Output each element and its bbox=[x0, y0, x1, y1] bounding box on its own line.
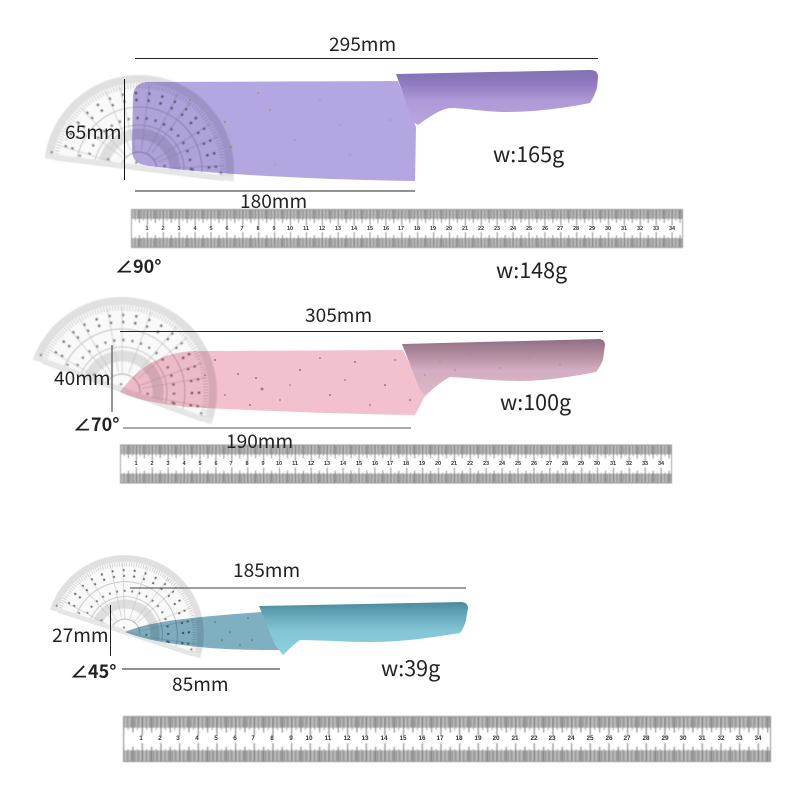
ruler 2: 29 bbox=[578, 461, 584, 467]
dimension 185mm: 185mm bbox=[233, 555, 300, 583]
ruler 1: 22 bbox=[478, 226, 484, 232]
ruler 1: 9 bbox=[272, 226, 276, 232]
ruler 1: 14 bbox=[351, 226, 358, 232]
ruler 1: 15 bbox=[367, 226, 373, 232]
ruler 3: 23 bbox=[548, 735, 556, 742]
blade 2 bbox=[120, 350, 425, 415]
weight 165g: w:165g bbox=[493, 138, 564, 169]
ruler 2: 12 bbox=[308, 461, 314, 467]
ruler 1: 2 bbox=[161, 226, 165, 232]
dimension 65mm bbox=[65, 79, 124, 180]
knife 1: cleaver purple bbox=[132, 70, 598, 181]
ruler 1: 29 bbox=[589, 226, 595, 232]
blade 2 speckles bbox=[204, 357, 411, 406]
ruler 1: 18 bbox=[414, 226, 420, 232]
ruler 1: 21 bbox=[462, 226, 468, 232]
ruler 3: 26 bbox=[605, 735, 613, 742]
ruler 3: 6 bbox=[233, 735, 237, 742]
dimension 190mm: 190mm bbox=[226, 426, 293, 454]
weight 148g: w:148g bbox=[496, 254, 567, 285]
ruler 3: 11 bbox=[325, 735, 332, 742]
blade 1 bbox=[132, 81, 416, 181]
protractor 1 bbox=[45, 64, 245, 182]
ruler 2: 24 bbox=[499, 461, 506, 467]
knife 2: chef pink bbox=[120, 339, 605, 415]
ruler 1: 12 bbox=[319, 226, 325, 232]
ruler 3: 30 bbox=[679, 735, 687, 742]
ruler 3: 31 bbox=[698, 735, 706, 742]
ruler 2: 18 bbox=[403, 461, 409, 467]
ruler 2: 3 bbox=[166, 461, 170, 467]
ruler 1: 23 bbox=[494, 226, 500, 232]
ruler 1: 26 bbox=[542, 226, 548, 232]
ruler 3: 15 bbox=[399, 735, 407, 742]
ruler 2: 26 bbox=[531, 461, 537, 467]
ruler 2: 34 bbox=[658, 461, 665, 467]
ruler 1: 32 bbox=[637, 226, 643, 232]
ruler 1: 10 bbox=[287, 226, 293, 232]
ruler 2: 19 bbox=[419, 461, 425, 467]
ruler 1: 28 bbox=[573, 226, 579, 232]
weight 39g: w:39g bbox=[381, 652, 440, 683]
ruler 1: 13 bbox=[335, 226, 341, 232]
weight 100g: w:100g bbox=[500, 386, 571, 417]
ruler 1: 6 bbox=[225, 226, 229, 232]
ruler 2: 13 bbox=[324, 461, 330, 467]
ruler 2: 22 bbox=[467, 461, 473, 467]
dimension 40mm: 40mm bbox=[54, 363, 111, 391]
ruler 3: 34 bbox=[754, 735, 762, 742]
ruler 1: 20 bbox=[446, 226, 452, 232]
ruler 1: 4 bbox=[193, 226, 197, 232]
ruler 3: 27 bbox=[623, 735, 631, 742]
ruler 3: 9 bbox=[289, 735, 293, 742]
ruler 1: 1 bbox=[145, 226, 149, 232]
ruler 3: 18 bbox=[455, 735, 463, 742]
ruler 3: 4 bbox=[195, 735, 199, 742]
ruler 2: 7 bbox=[229, 461, 233, 467]
ruler 2: 8 bbox=[245, 461, 249, 467]
ruler 2: 4 bbox=[182, 461, 186, 467]
dimension 295mm: 295mm bbox=[329, 29, 396, 57]
ruler 3: 16 bbox=[418, 735, 426, 742]
angle 45: ∠45° bbox=[70, 658, 117, 684]
dimension 65mm: 65mm bbox=[65, 117, 122, 145]
ruler 1: 31 bbox=[621, 226, 627, 232]
ruler 3: 2 bbox=[158, 735, 162, 742]
angle 70: ∠70° bbox=[73, 411, 120, 437]
blade 3 speckles bbox=[214, 617, 253, 646]
ruler 2: 11 bbox=[292, 461, 298, 467]
handle 1 bbox=[396, 70, 598, 125]
ruler 2: 9 bbox=[261, 461, 265, 467]
dimension 85mm: 85mm bbox=[172, 669, 229, 697]
protractor 2 bbox=[33, 270, 244, 424]
ruler 2: 2 bbox=[150, 461, 154, 467]
ruler 1: 25 bbox=[526, 226, 532, 232]
ruler 3: 7 bbox=[251, 735, 255, 742]
ruler 3: 19 bbox=[474, 735, 482, 742]
dimension 180mm: 180mm bbox=[240, 186, 307, 214]
ruler 3: 21 bbox=[511, 735, 519, 742]
ruler 1: 17 bbox=[398, 226, 404, 232]
ruler 2: 27 bbox=[546, 461, 552, 467]
ruler 3 bbox=[123, 716, 771, 762]
ruler 2: 33 bbox=[642, 461, 648, 467]
ruler 3: 17 bbox=[436, 735, 444, 742]
ruler 1: 34 bbox=[669, 226, 676, 232]
ruler 2: 31 bbox=[610, 461, 616, 467]
ruler 3: 32 bbox=[717, 735, 725, 742]
ruler 2: 1 bbox=[134, 461, 138, 467]
ruler 2: 20 bbox=[435, 461, 441, 467]
ruler 3: 28 bbox=[642, 735, 650, 742]
dimension 27mm bbox=[52, 605, 110, 656]
ruler 2: 17 bbox=[387, 461, 393, 467]
ruler 3: 1 bbox=[139, 735, 143, 742]
ruler 1: 8 bbox=[256, 226, 260, 232]
ruler 3: 24 bbox=[567, 735, 575, 742]
ruler 1: 19 bbox=[430, 226, 436, 232]
ruler 2: 25 bbox=[515, 461, 521, 467]
dimension 305mm: 305mm bbox=[305, 300, 372, 328]
dimension 27mm: 27mm bbox=[52, 620, 109, 648]
ruler 2: 10 bbox=[276, 461, 282, 467]
ruler 2: 6 bbox=[214, 461, 218, 467]
ruler 1: 30 bbox=[605, 226, 611, 232]
knife 3: paring teal bbox=[125, 602, 468, 655]
ruler 1: 5 bbox=[209, 226, 213, 232]
angle 90: ∠90° bbox=[115, 253, 162, 279]
ruler 2: 5 bbox=[198, 461, 202, 467]
ruler 2: 21 bbox=[451, 461, 457, 467]
ruler 3: 29 bbox=[661, 735, 669, 742]
handle 3 bbox=[259, 602, 468, 655]
ruler 3: 5 bbox=[214, 735, 218, 742]
protractor 3 bbox=[50, 535, 224, 658]
ruler 3: 13 bbox=[361, 735, 369, 742]
ruler 1: 16 bbox=[383, 226, 389, 232]
ruler 3: 3 bbox=[176, 735, 180, 742]
ruler 2: 14 bbox=[340, 461, 347, 467]
ruler 1: 27 bbox=[557, 226, 563, 232]
blade 3 bbox=[125, 612, 288, 655]
dimension 40mm bbox=[54, 345, 112, 412]
ruler 2: 23 bbox=[483, 461, 489, 467]
ruler 2: 16 bbox=[372, 461, 378, 467]
ruler 2 bbox=[120, 444, 672, 484]
ruler 3: 20 bbox=[492, 735, 500, 742]
ruler 1: 7 bbox=[240, 226, 244, 232]
ruler 2: 32 bbox=[626, 461, 632, 467]
ruler 1: 33 bbox=[653, 226, 659, 232]
ruler 2: 28 bbox=[562, 461, 568, 467]
ruler 3: 22 bbox=[530, 735, 538, 742]
ruler 1: 11 bbox=[303, 226, 309, 232]
blade 1 speckles bbox=[164, 92, 391, 166]
ruler 3: 14 bbox=[380, 735, 388, 742]
ruler 2: 30 bbox=[594, 461, 600, 467]
ruler 3: 10 bbox=[305, 735, 313, 742]
handle 2 bbox=[402, 339, 605, 396]
ruler 3: 8 bbox=[270, 735, 274, 742]
ruler 3: 12 bbox=[343, 735, 351, 742]
ruler 1: 3 bbox=[177, 226, 181, 232]
ruler 3: 25 bbox=[586, 735, 594, 742]
ruler 2: 15 bbox=[356, 461, 362, 467]
ruler 3: 33 bbox=[735, 735, 743, 742]
ruler 1 bbox=[131, 209, 683, 248]
handle 2 speckles bbox=[424, 351, 586, 376]
ruler 1: 24 bbox=[510, 226, 517, 232]
